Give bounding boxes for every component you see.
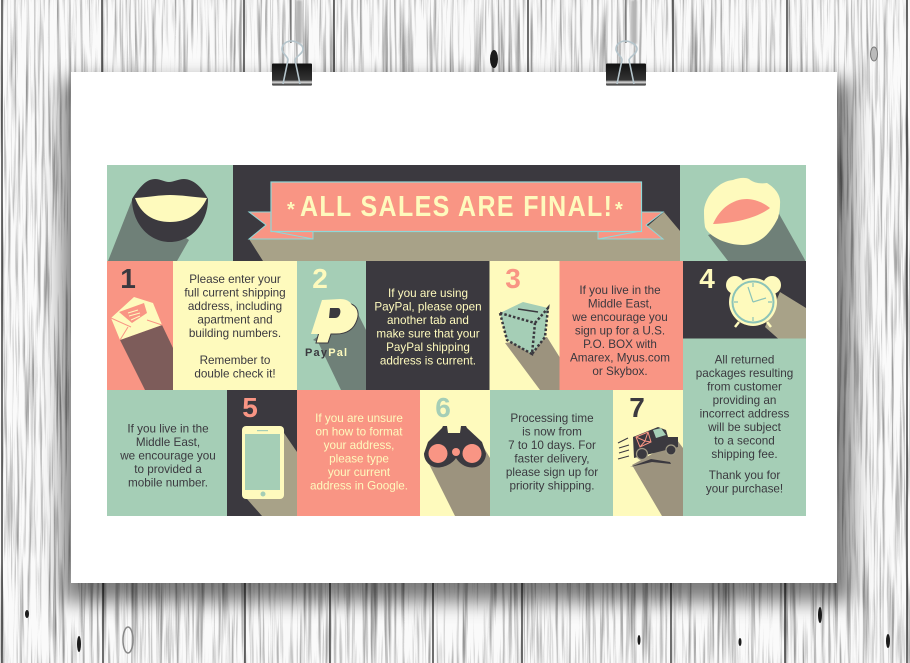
- number 4: 4: [699, 263, 715, 294]
- text: your purchase!: [706, 482, 783, 496]
- poster sheet: [71, 72, 837, 583]
- step 6 text: Processing time: [510, 412, 594, 425]
- step 6 text: is now from: [522, 426, 582, 438]
- text: Please enter your: [189, 273, 281, 286]
- middle east mobile note: [119, 423, 216, 490]
- icon: delivery truck: [618, 427, 683, 516]
- text: another tab and: [387, 314, 469, 327]
- number 2: 2: [312, 263, 328, 294]
- icon: alarm clock: [726, 276, 806, 338]
- number 5: 5: [242, 392, 258, 423]
- banner shadow: [249, 212, 680, 261]
- text: sign up for a U.S.: [575, 324, 665, 338]
- text: incorrect address: [700, 408, 789, 420]
- step 4: [696, 263, 806, 496]
- step 7: [618, 392, 683, 516]
- middle east mobile note: If you live in the: [127, 423, 209, 436]
- step 1: [111, 263, 286, 390]
- step 2: [305, 263, 482, 390]
- title: *: [615, 199, 623, 221]
- text: from customer: [707, 380, 782, 394]
- text: packages resulting: [696, 367, 793, 380]
- text: will be subject: [707, 421, 782, 434]
- banner: [249, 182, 663, 239]
- text: P.O. BOX with: [583, 338, 657, 351]
- text: providing an: [713, 394, 776, 407]
- text: [570, 284, 670, 378]
- number 7: 7: [629, 392, 645, 423]
- step 5 text: your current: [328, 466, 391, 479]
- text: [696, 354, 793, 496]
- text: Remember to: [200, 354, 271, 367]
- step 5 text: your address,: [324, 439, 394, 452]
- middle east mobile note: mobile number.: [128, 476, 208, 490]
- text: double check it!: [194, 368, 276, 380]
- text: full current shipping: [184, 286, 286, 300]
- text: shipping fee.: [711, 448, 778, 461]
- text: If you are using: [388, 287, 468, 300]
- icon: mobile phone: [242, 426, 297, 516]
- middle east mobile note: Middle East,: [136, 436, 200, 449]
- text: [374, 287, 482, 368]
- number 3: 3: [505, 263, 521, 294]
- text: to a second: [714, 434, 775, 448]
- icon: envelope: [111, 297, 173, 390]
- number 6: 6: [435, 392, 451, 423]
- step 5: [242, 392, 297, 516]
- text: All returned: [715, 354, 774, 366]
- text: PayPal, please open: [374, 300, 482, 314]
- icon: yellow lips: [704, 178, 805, 261]
- text: If you live in the: [579, 284, 661, 297]
- cell backgrounds: [107, 165, 806, 516]
- step 3: [500, 263, 670, 390]
- title: ALL SALES ARE FINAL!: [300, 190, 612, 222]
- text: apartment and: [197, 314, 273, 327]
- infographic grid: [107, 165, 806, 516]
- step 5 text: [310, 412, 408, 492]
- icon: PayPal logo: [305, 299, 366, 390]
- text: Amarex, Myus.com: [570, 352, 670, 364]
- step 5 text: on how to format: [315, 426, 403, 438]
- middle east mobile note: we encourage you: [119, 450, 216, 462]
- step 6 text: faster delivery,: [514, 452, 590, 466]
- text: we encourage you: [571, 311, 668, 324]
- text: Middle East,: [588, 298, 652, 310]
- text: [184, 273, 286, 380]
- text: make sure that your: [376, 328, 480, 340]
- text: address, including: [188, 300, 282, 313]
- step 5 text: If you are unsure: [315, 412, 403, 425]
- icon: dark lips: [108, 179, 208, 261]
- poster shadow: [62, 80, 852, 602]
- step 5 text: address in Google.: [310, 480, 408, 492]
- step 5 text: please type: [329, 452, 389, 466]
- PayPal wordmark: PayPal: [305, 347, 348, 359]
- text: PayPal shipping: [386, 341, 470, 354]
- number 1: 1: [120, 263, 136, 294]
- step 6 text: 7 to 10 days. For: [508, 439, 596, 452]
- step 6: [424, 392, 490, 516]
- text: Thank you for: [709, 469, 780, 482]
- text: building numbers.: [189, 327, 281, 340]
- icon: parcel box: [500, 302, 560, 390]
- ribbon tails: [249, 212, 663, 239]
- text: address is current.: [380, 354, 476, 368]
- step 6 text: please sign up for: [506, 466, 598, 479]
- string: [296, 0, 302, 44]
- step 6 text: [506, 412, 598, 492]
- binder clip right: [606, 0, 646, 86]
- icon: binoculars: [424, 426, 490, 516]
- step 6 text: priority shipping.: [509, 480, 595, 492]
- middle east mobile note: to provided a: [134, 463, 202, 476]
- title: *: [287, 199, 295, 221]
- text: or Skybox.: [592, 365, 648, 378]
- string: [631, 0, 637, 44]
- binder clip left: [272, 0, 312, 86]
